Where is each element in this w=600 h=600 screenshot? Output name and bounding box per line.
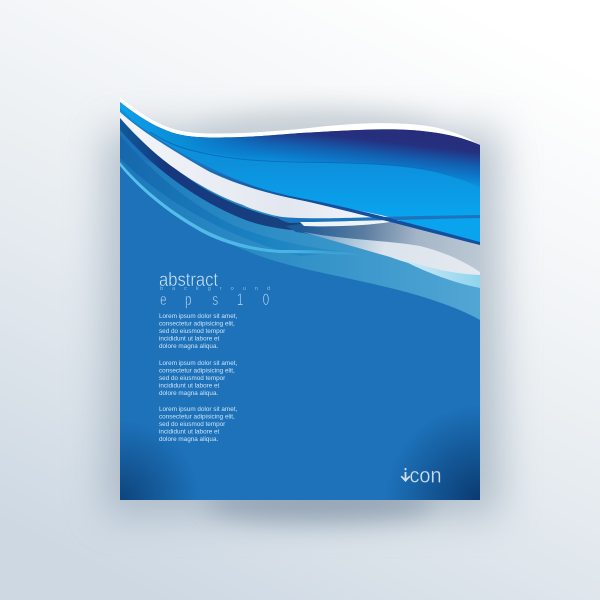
icon: down arrow xyxy=(401,468,410,482)
abstract: abstract xyxy=(159,270,219,291)
text block 1: sed do eiusmod tempor xyxy=(159,328,225,335)
wave: translucent light blue band xyxy=(120,150,480,320)
card shadow xyxy=(105,109,500,522)
wave: blue line under ribbon xyxy=(275,215,480,223)
wave: dark navy ribbon xyxy=(120,116,305,231)
wave: main navy to blue top xyxy=(120,102,480,190)
heading: abstract background eps 10 xyxy=(159,270,270,310)
wave: thin cyan highlight xyxy=(120,162,370,256)
wave: white streak xyxy=(300,220,400,226)
text block 2: incididunt ut labore et xyxy=(159,382,220,390)
text block 1: consectetur adipisicing elit, xyxy=(159,320,235,328)
text block 1: dolore magna aliqua. xyxy=(159,343,218,350)
logo word: con xyxy=(410,464,442,488)
card corner vignettes xyxy=(120,430,190,500)
text block 2: sed do eiusmod tempor xyxy=(159,375,225,382)
text block 2: Lorem ipsum dolor sit amet, xyxy=(159,360,238,367)
white top edge of card xyxy=(120,97,480,145)
wave: cyan left fade xyxy=(120,102,248,148)
wave: grey shaded band xyxy=(286,222,480,272)
text block 3: sed do eiusmod tempor xyxy=(159,421,225,428)
text block 2: dolore magna aliqua. xyxy=(159,390,218,397)
text block 3: consectetur adipisicing elit, xyxy=(159,414,235,420)
card base xyxy=(120,100,480,500)
text block 2: consectetur adipisicing elit, xyxy=(159,368,235,374)
logo: icon xyxy=(401,464,442,488)
wave: cyan highlight strip xyxy=(395,256,480,288)
text block 3: Lorem ipsum dolor sit amet, xyxy=(159,406,238,413)
wave: fold line xyxy=(150,132,450,176)
wave: white ribbon xyxy=(120,112,397,219)
text block 3: incididunt ut labore et xyxy=(159,428,220,436)
wave: bright cyan lower ribbon xyxy=(120,108,472,190)
text block 1: Lorem ipsum dolor sit amet, xyxy=(159,313,238,320)
panel: blue card with waves xyxy=(120,100,480,500)
wave: dark edge line xyxy=(177,153,480,245)
text block 1: incididunt ut labore et xyxy=(159,336,220,342)
wave: pale swath xyxy=(303,232,480,277)
text block 3: dolore magna aliqua. xyxy=(159,436,218,443)
background: background xyxy=(160,286,270,292)
eps 10: eps 10 xyxy=(160,291,269,310)
wave: mid-blue strip xyxy=(120,135,345,256)
